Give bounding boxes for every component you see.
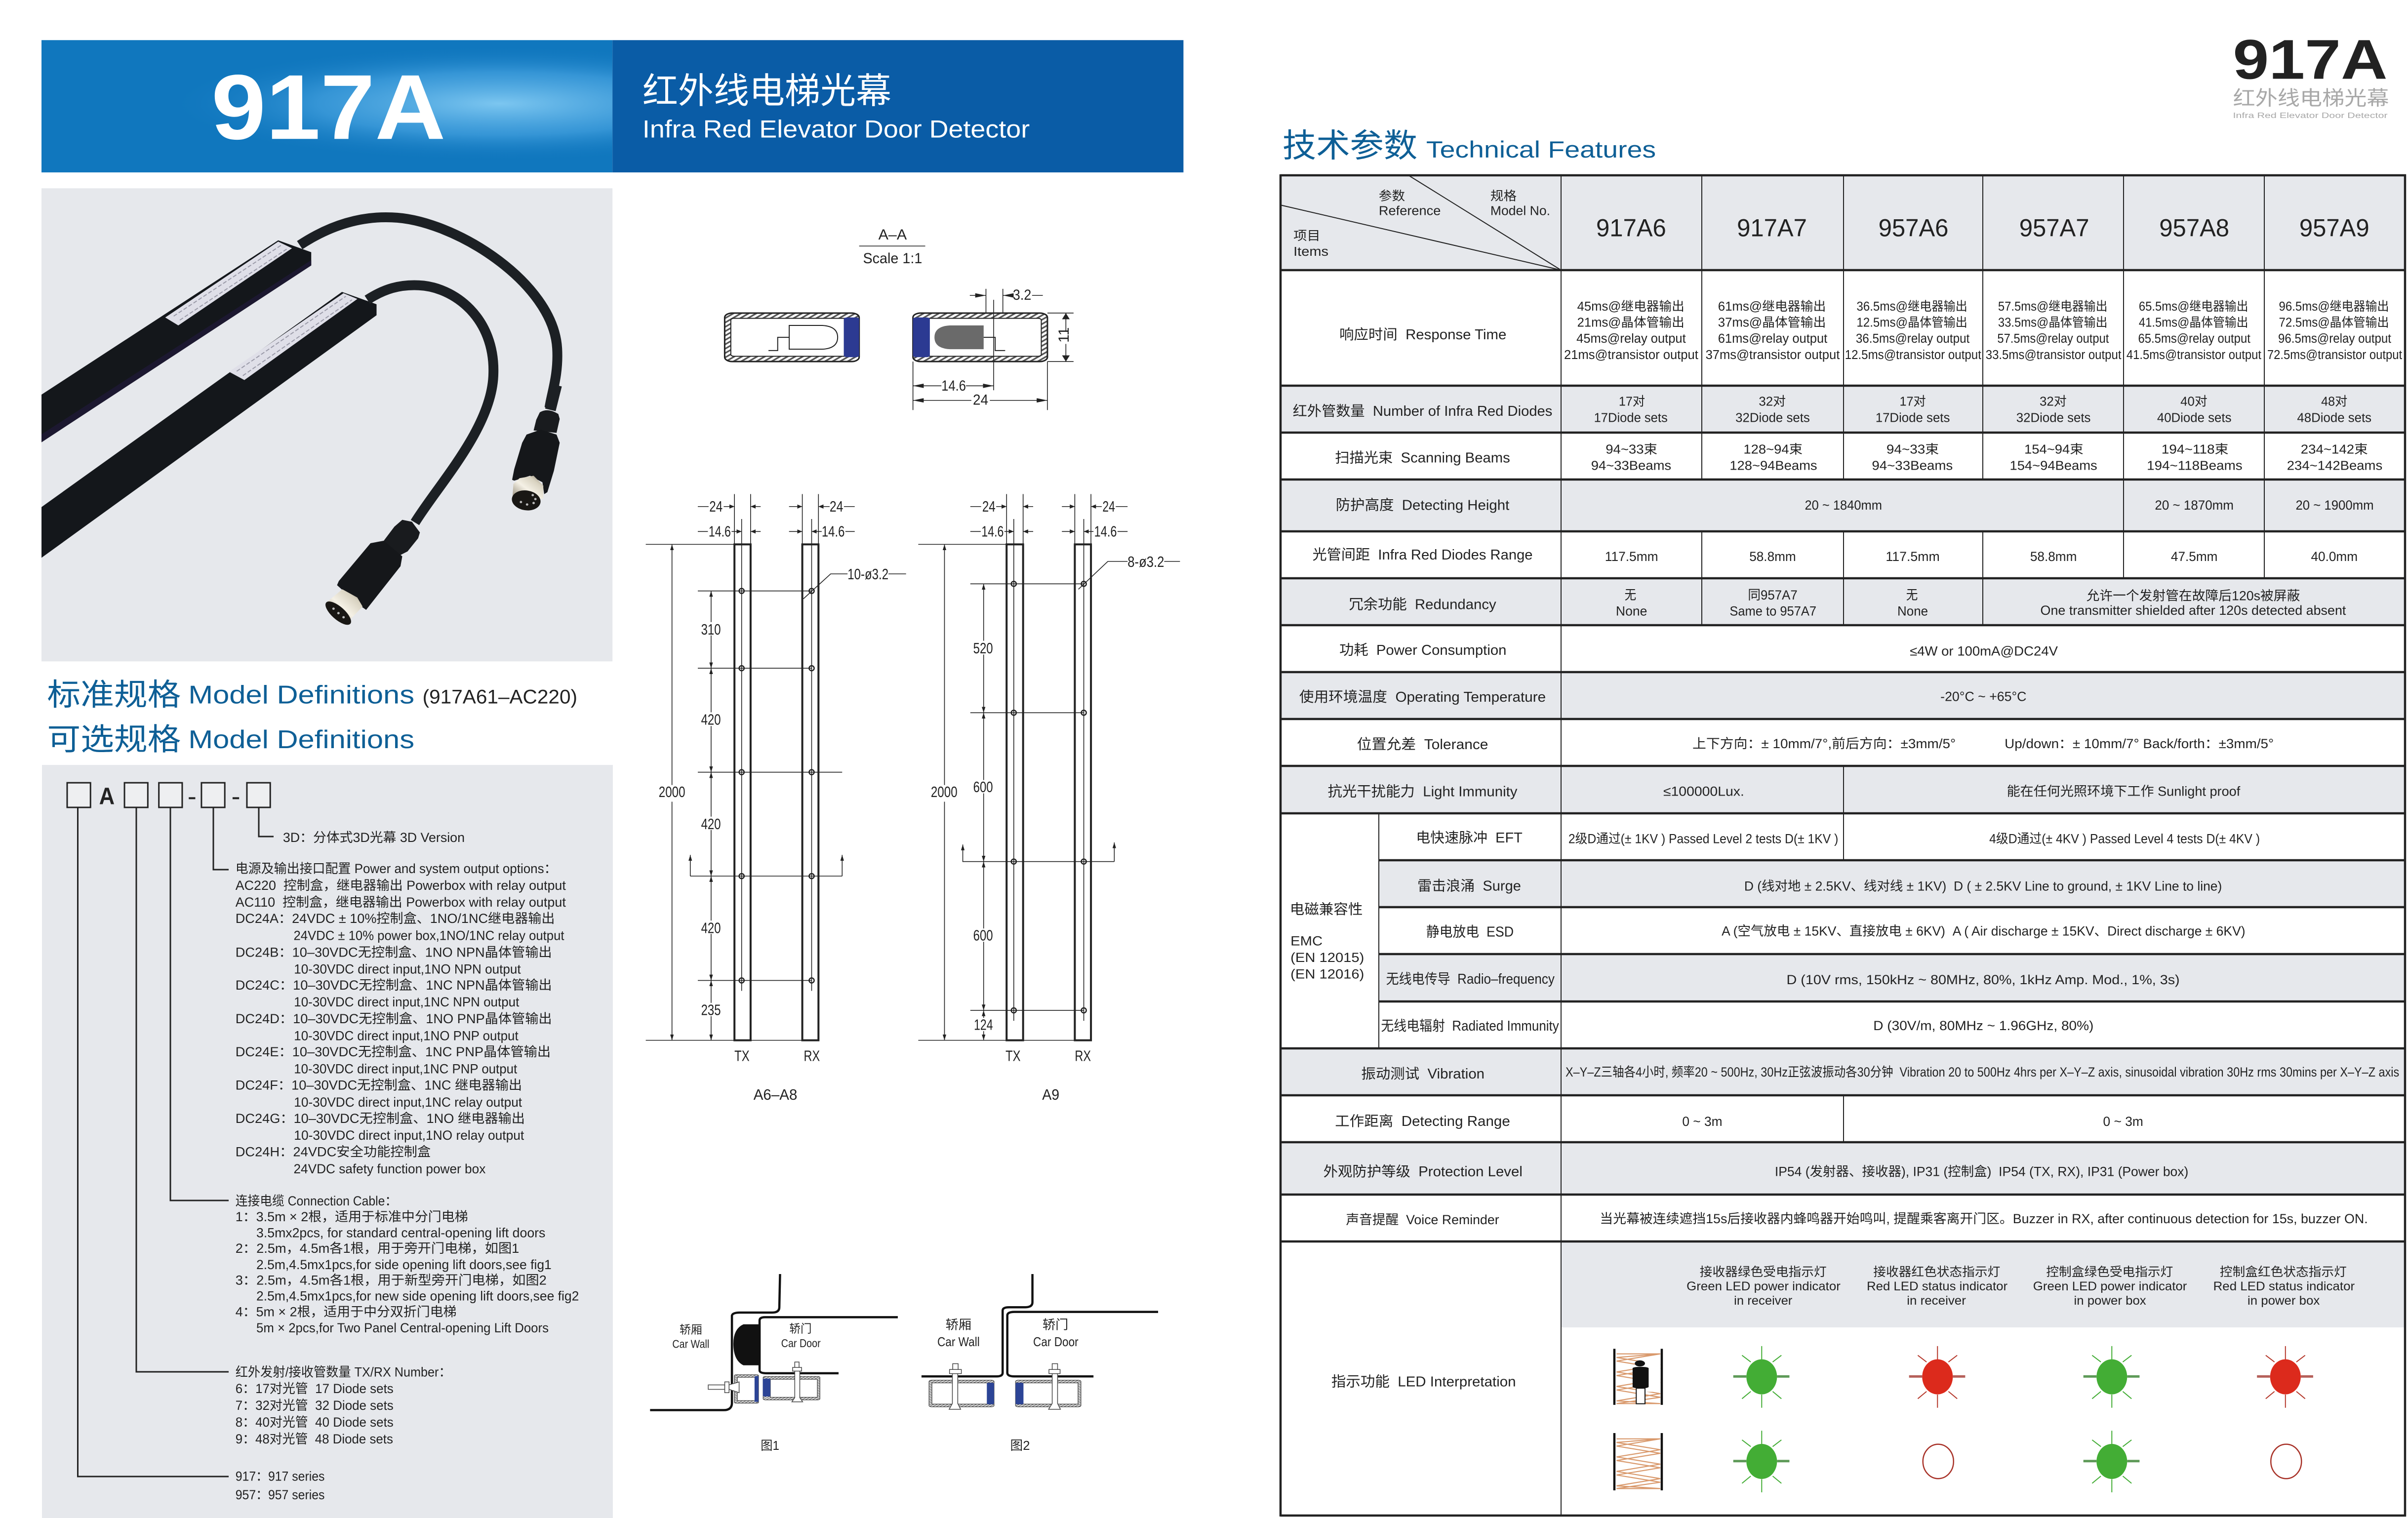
EMC group label bbox=[1290, 901, 1364, 982]
row: response time: 45ms@relay output bbox=[1576, 331, 1686, 346]
table lower rows: 电磁兼容性 bbox=[1290, 901, 1363, 917]
A6-A8 labels: 420 bbox=[701, 919, 721, 936]
model names: 957A8 bbox=[2159, 214, 2229, 242]
A6-A8 labels: 24 bbox=[830, 498, 843, 515]
header corner labels: Reference bbox=[1379, 204, 1441, 218]
dimension labels: 24 bbox=[973, 392, 988, 408]
row: response time: 41.5ms@晶体管输出 bbox=[2139, 315, 2248, 329]
row: redundancy: 无 bbox=[1906, 588, 1918, 602]
row: LED interpretation: 指示功能 LED Interpretation bbox=[1331, 1374, 1516, 1390]
text block: 3D version and power options: DC24A：24VDC ± 10%控制盒、1NO/1NC继电器输出 bbox=[236, 912, 555, 926]
row: response time: 61ms@继电器输出 bbox=[1718, 299, 1826, 313]
text block: 3D version and power options: DC24E：10–30VDC无控制盒、1NC PNP晶体管输出 bbox=[236, 1045, 551, 1059]
model names: 957A6 bbox=[1879, 214, 1948, 242]
text block: 3D version and power options: DC24F：10–30VDC无控制盒、1NC 继电器输出 bbox=[236, 1078, 522, 1093]
row: number of infra red diodes: 17对 bbox=[1899, 394, 1926, 408]
LED column headings: in power box bbox=[2074, 1294, 2146, 1307]
heading: optional model definitions: Model Definitions bbox=[188, 725, 414, 754]
dimension lines bbox=[913, 289, 1074, 410]
table lower rows bbox=[1290, 830, 2399, 1227]
heading: standard model definitions: (917A61–AC220) bbox=[423, 685, 577, 708]
row: scanning beams: 194~118Beams bbox=[2147, 459, 2243, 473]
panel: product photo bbox=[41, 188, 612, 661]
table middle rows: -20°C ~ +65°C bbox=[1940, 689, 2026, 704]
row: infra red diodes range: 117.5mm bbox=[1886, 549, 1940, 564]
text block: power options continued, cable and diode options: 6：17对光管 17 Diode sets bbox=[236, 1381, 394, 1396]
diagram: installation figures 1 and 2: Car Door bbox=[1033, 1335, 1079, 1349]
row: response time: 57.5ms@继电器输出 bbox=[1998, 299, 2107, 313]
figure 2 labels: 图2 bbox=[1010, 1438, 1030, 1453]
dimension label: 11: 11 bbox=[1056, 327, 1072, 343]
row: surge bbox=[1417, 878, 2222, 894]
heading: optional model definitions: 可选规格 bbox=[47, 722, 181, 757]
row: response time: 12.5ms@晶体管输出 bbox=[1856, 315, 1967, 329]
table lower rows: (EN 12015) bbox=[1290, 950, 1364, 965]
figure 1 labels: 轿门 bbox=[789, 1322, 812, 1335]
text block: power options continued, cable and diode options: 24VDC safety function power box bbox=[293, 1161, 485, 1176]
text block: 3D version and power options: DC24C：10–30VDC无控制盒、1NC NPN晶体管输出 bbox=[236, 978, 552, 993]
text block: power options continued, cable and diode options: 3.5mx2pcs, for standard central-opening lift doors bbox=[256, 1226, 545, 1240]
banner left gradient bbox=[41, 40, 612, 172]
A9 labels: 24 bbox=[1102, 498, 1115, 515]
row: number of infra red diodes bbox=[1293, 394, 2371, 425]
row: detecting height: 防护高度 Detecting Height bbox=[1336, 497, 1509, 513]
A9 bars bbox=[918, 494, 1180, 1040]
dimension labels: 14.6 bbox=[941, 377, 966, 394]
table lower rows: D (30V/m, 80MHz ~ 1.96GHz, 80%) bbox=[1873, 1018, 2093, 1033]
row: number of infra red diodes: 32对 bbox=[1759, 394, 1786, 408]
figure 1 labels: 轿厢 bbox=[680, 1323, 702, 1336]
section title bbox=[859, 226, 925, 266]
A6-A8 labels: 2000 bbox=[659, 783, 685, 800]
row: number of infra red diodes: 40Diode sets bbox=[2157, 411, 2232, 425]
row: response time: 37ms@transistor output bbox=[1706, 348, 1840, 362]
icons: LEDs when beam blocked bbox=[1733, 1346, 2313, 1408]
photo background bbox=[41, 188, 612, 661]
A9 labels: 14.6 bbox=[1094, 523, 1117, 540]
dimension labels bbox=[941, 286, 1031, 408]
row: redundancy: None bbox=[1897, 603, 1928, 618]
diagram: installation figures 1 and 2 bbox=[650, 1274, 1158, 1453]
row: infra red diodes range bbox=[1312, 547, 2358, 564]
figure 1 labels: 图1 bbox=[761, 1439, 779, 1453]
gray row fills bbox=[1281, 175, 2405, 1327]
text block: 3D version and power options: AC110 控制盒，继电器输出 Powerbox with relay output bbox=[236, 895, 566, 910]
right cross section bbox=[913, 313, 1047, 361]
header corner labels: 规格 bbox=[1490, 189, 1517, 203]
section title: A–A bbox=[879, 226, 907, 242]
text block: power options continued, cable and diode options: DC24H：24VDC安全功能控制盒 bbox=[236, 1145, 431, 1159]
row: surge: 雷击浪涌 Surge bbox=[1417, 878, 1521, 894]
text block: 3D version and power options: 10-30VDC direct input,1NC PNP output bbox=[294, 1062, 518, 1077]
A6-A8 labels: 310 bbox=[701, 621, 721, 638]
row: number of infra red diodes: 32对 bbox=[2040, 394, 2067, 408]
A9 labels: 14.6 bbox=[981, 523, 1003, 540]
row: EFT: 电快速脉冲 EFT bbox=[1416, 830, 1523, 845]
title: 917A: 917A bbox=[211, 56, 446, 159]
text block: 3D version and power options: AC220 控制盒，继电器输出 Powerbox with relay output bbox=[236, 879, 566, 893]
text block: 3D version and power options: 24VDC ± 10% power box,1NO/1NC relay output bbox=[293, 928, 564, 943]
row: response time: 33.5ms@晶体管输出 bbox=[1998, 315, 2107, 329]
row: light immunity: 抗光干扰能力 Light Immunity bbox=[1327, 784, 1518, 799]
row: redundancy: 冗余功能 Redundancy bbox=[1349, 597, 1496, 612]
row: scanning beams: 94~33束 bbox=[1605, 442, 1657, 456]
row: detecting height bbox=[1336, 497, 2374, 513]
row: protection level bbox=[1324, 1163, 2188, 1179]
text block: power options continued, cable and diode options: 957：957 series bbox=[236, 1487, 324, 1502]
A9 labels bbox=[931, 498, 1164, 1103]
row: number of infra red diodes: 17对 bbox=[1619, 394, 1645, 408]
A9 labels: 24 bbox=[982, 498, 996, 515]
A6-A8 labels: 235 bbox=[701, 1001, 721, 1018]
LED column headings: 接收器绿色受电指示灯 bbox=[1700, 1265, 1827, 1279]
row: infra red diodes range: 47.5mm bbox=[2171, 549, 2217, 564]
row: EFT bbox=[1416, 830, 2260, 846]
A6-A8 labels: RX bbox=[804, 1047, 820, 1064]
text block: 3D version and power options: 电源及输出接口配置 Power and system output options： bbox=[236, 862, 557, 877]
LED column headings bbox=[1686, 1265, 2355, 1307]
LED column headings: Red LED status indicator bbox=[1867, 1279, 2007, 1293]
row: voice reminder bbox=[1346, 1211, 2368, 1227]
heading: standard model definitions: 标准规格 bbox=[47, 678, 181, 712]
text block: power options continued, cable and diode options: 10-30VDC direct input,1NO relay output bbox=[294, 1128, 524, 1143]
text block: power options continued, cable and diode options: 3：2.5m，4.5m各1根，用于新型旁开门电梯，如图2 bbox=[236, 1273, 547, 1288]
connector lines bbox=[78, 807, 274, 1477]
LED column headings: 接收器红色状态指示灯 bbox=[1873, 1265, 2000, 1279]
figure 1 walls bbox=[650, 1274, 898, 1410]
row: response time: 45ms@继电器输出 bbox=[1577, 299, 1685, 313]
header corner labels: 项目 bbox=[1293, 229, 1321, 243]
text block: power options continued, cable and diode options: 10-30VDC direct input,1NC relay output bbox=[294, 1095, 522, 1110]
A6-A8 labels bbox=[659, 498, 888, 1103]
model names: 917A7 bbox=[1737, 214, 1807, 242]
A6-A8 arrows bbox=[672, 507, 855, 1040]
icon: beams clear bbox=[1614, 1433, 1662, 1490]
row: infra red diodes range: 117.5mm bbox=[1605, 549, 1658, 564]
row: response time bbox=[1339, 299, 2402, 362]
A6-A8 bars bbox=[646, 494, 906, 1040]
heading: technical features: 技术参数 bbox=[1283, 127, 1417, 164]
row: response time: 57.5ms@relay output bbox=[1997, 331, 2109, 346]
header corner labels: 参数 bbox=[1379, 189, 1405, 203]
row: tolerance bbox=[1357, 736, 2274, 753]
left cross section bbox=[724, 313, 859, 361]
heading: standard model definitions bbox=[47, 678, 577, 712]
row: radio frequency: 无线电传导 Radio–frequency bbox=[1386, 971, 1555, 987]
table header and first rows bbox=[1293, 189, 2402, 473]
text block: power options continued, cable and diode options: 917：917 series bbox=[236, 1469, 324, 1484]
row: EFT: 2级D通过(± 1KV ) Passed Level 2 tests D(± 1KV ) bbox=[1568, 832, 1838, 846]
banner right panel bbox=[612, 40, 1183, 172]
row: scanning beams: 194~118束 bbox=[2162, 442, 2229, 456]
text block: 3D version and power options: 3D：分体式3D光幕 3D Version bbox=[283, 831, 465, 845]
connector plugs bbox=[321, 385, 560, 628]
row: radio frequency bbox=[1386, 971, 2180, 987]
table lower rows: (EN 12016) bbox=[1290, 966, 1364, 982]
text block: power options continued, cable and diode options: 8：40对光管 40 Diode sets bbox=[236, 1415, 394, 1430]
figure 2 sensors bbox=[929, 1363, 1081, 1409]
row: number of infra red diodes: 17Diode sets bbox=[1876, 411, 1950, 425]
row: response time: 36.5ms@relay output bbox=[1856, 331, 1969, 346]
A9 holes bbox=[1011, 581, 1086, 1013]
table middle rows bbox=[1299, 497, 2374, 799]
panel background bbox=[42, 765, 613, 1518]
row: redundancy bbox=[1349, 588, 2346, 618]
heading: standard model definitions: Model Definitions bbox=[188, 680, 414, 709]
row: detecting range: 工作距离 Detecting Range bbox=[1335, 1113, 1510, 1129]
figure 2 labels bbox=[937, 1318, 1079, 1453]
LED column headings: in receiver bbox=[1907, 1294, 1966, 1307]
LED column headings: in receiver bbox=[1734, 1294, 1792, 1307]
row: number of infra red diodes: 40对 bbox=[2180, 394, 2207, 408]
diagram: installation figures 1 and 2: Car Door bbox=[781, 1337, 821, 1350]
text block: power options continued, cable and diode options: 9：48对光管 48 Diode sets bbox=[236, 1432, 393, 1446]
row: redundancy: 同957A7 bbox=[1748, 588, 1798, 602]
row: LED interpretation bbox=[1331, 1265, 2355, 1492]
A6-A8 labels: 24 bbox=[709, 498, 722, 515]
row: redundancy: Same to 957A7 bbox=[1729, 603, 1816, 618]
row: number of infra red diodes: 32Diode sets bbox=[2016, 411, 2090, 425]
row: infra red diodes range: 光管间距 Infra Red Diodes Range bbox=[1312, 547, 1533, 563]
upper sensor bar bbox=[41, 240, 311, 442]
row: ESD: 静电放电 ESD bbox=[1426, 923, 1514, 940]
A6-A8 labels: 420 bbox=[701, 711, 721, 728]
model names: 917A6 bbox=[1596, 214, 1666, 242]
figure 2 walls bbox=[922, 1274, 1158, 1376]
row: response time: 65.5ms@继电器输出 bbox=[2139, 299, 2248, 313]
model code boxes: A bbox=[99, 783, 115, 809]
row: voice reminder: 声音提醒 Voice Reminder bbox=[1346, 1212, 1499, 1227]
figure 2 labels: Car Wall bbox=[937, 1335, 980, 1349]
text block: power options continued, cable and diode options: 2.5m,4.5mx1pcs,for new side opening lift doors,see fig2 bbox=[256, 1289, 579, 1304]
row: vibration: 振动测试 Vibration bbox=[1361, 1066, 1485, 1081]
figure 2 labels: 轿厢 bbox=[946, 1318, 971, 1332]
row: redundancy: 无 bbox=[1625, 588, 1636, 602]
row: response time: 12.5ms@transistor output bbox=[1845, 348, 1981, 362]
A9 labels: 8-ø3.2 bbox=[1127, 553, 1164, 570]
row: response time: 65.5ms@relay output bbox=[2138, 331, 2250, 346]
A9 labels: 2000 bbox=[931, 783, 958, 800]
row: tolerance: 位置允差 Tolerance bbox=[1357, 736, 1488, 753]
heading: optional model definitions bbox=[47, 722, 414, 757]
row: detecting range: 0 ~ 3m bbox=[1682, 1114, 1723, 1129]
diagram: A6-A8 and A9 mounting dimensions bbox=[646, 494, 1180, 1103]
model names: 957A7 bbox=[2019, 214, 2089, 242]
figure 1 labels: Car Wall bbox=[672, 1338, 709, 1351]
title: English product name: Infra Red Elevator Door Detector bbox=[642, 116, 1030, 143]
text block: power options continued, cable and diode options bbox=[236, 1095, 579, 1502]
A9 labels: TX bbox=[1005, 1047, 1021, 1064]
row: redundancy: None bbox=[1616, 603, 1647, 618]
text block: power options continued, cable and diode options: 5m × 2pcs,for Two Panel Central-opening Lift Doors bbox=[256, 1320, 549, 1335]
text block: power options continued, cable and diode options: 2.5m,4.5mx1pcs,for side opening lift doors,see fig1 bbox=[256, 1257, 552, 1272]
row: operating temperature: 使用环境温度 Operating Temperature bbox=[1299, 689, 1546, 705]
row: scanning beams: 128~94Beams bbox=[1729, 459, 1817, 473]
text block: 3D version and power options: 10-30VDC direct input,1NC NPN output bbox=[294, 995, 520, 1009]
panel: technical parameter table bbox=[1280, 174, 2406, 1517]
panel: model code definitions bbox=[42, 765, 613, 1518]
cable 2 bbox=[367, 285, 493, 522]
lower sensor bar bbox=[41, 292, 376, 558]
A6-A8 labels: 14.6 bbox=[822, 523, 844, 540]
row: response time: 21ms@transistor output bbox=[1564, 348, 1698, 362]
title: Chinese product name: 红外线电梯光幕 bbox=[642, 71, 891, 111]
row: scanning beams bbox=[1335, 442, 2382, 473]
A6-A8 labels: 420 bbox=[701, 815, 721, 832]
upper connector bbox=[510, 385, 560, 513]
text block: 3D version and power options: DC24B：10–30VDC无控制盒、1NO NPN晶体管输出 bbox=[236, 945, 552, 960]
row: power consumption: 功耗 Power Consumption bbox=[1339, 642, 1506, 658]
row: light immunity bbox=[1327, 784, 2241, 799]
LED column headings: Green LED power indicator bbox=[1686, 1279, 1841, 1293]
figure 2 labels: 轿门 bbox=[1043, 1318, 1068, 1332]
row: response time: 36.5ms@继电器输出 bbox=[1856, 299, 1967, 313]
row: response time: 61ms@relay output bbox=[1718, 331, 1827, 346]
row: protection level: 外观防护等级 Protection Level bbox=[1324, 1163, 1523, 1179]
row: response time: 响应时间 Response Time bbox=[1339, 326, 1506, 342]
text block: power options continued, cable and diode options: 连接电缆 Connection Cable： bbox=[236, 1194, 397, 1208]
table header and first rows: Model No. bbox=[1490, 204, 1550, 218]
text block: power options continued, cable and diode options: 1：3.5m × 2根，适用于标准中分门电梯 bbox=[236, 1209, 468, 1224]
A9 labels: RX bbox=[1075, 1047, 1091, 1064]
row: response time: 21ms@晶体管输出 bbox=[1577, 315, 1685, 329]
text block: power options continued, cable and diode options: 红外发射/接收管数量 TX/RX Number： bbox=[236, 1365, 451, 1380]
A9 labels: 124 bbox=[974, 1016, 993, 1033]
row: detecting range bbox=[1335, 1113, 2143, 1129]
text block: 3D version and power options: DC24D：10–30VDC无控制盒、1NO PNP晶体管输出 bbox=[236, 1012, 552, 1026]
row: scanning beams: 128~94束 bbox=[1743, 442, 1803, 456]
A9 labels: 600 bbox=[973, 927, 993, 944]
section title: Scale 1:1 bbox=[863, 250, 922, 266]
row: number of infra red diodes: 48对 bbox=[2321, 394, 2347, 408]
icon: beams blocked by person bbox=[1614, 1349, 1662, 1405]
header corner labels: Items bbox=[1293, 244, 1328, 259]
heading: technical features: Technical Features bbox=[1426, 136, 1656, 162]
row: response time: 37ms@晶体管输出 bbox=[1718, 315, 1826, 329]
row: number of infra red diodes: 17Diode sets bbox=[1594, 411, 1668, 425]
A6-A8 labels: TX bbox=[734, 1047, 750, 1064]
lower connector bbox=[321, 520, 420, 628]
top right product logo bbox=[2233, 28, 2389, 120]
header corner labels bbox=[1293, 189, 1550, 259]
row: radiated immunity: 无线电辐射 Radiated Immunity bbox=[1381, 1018, 1559, 1034]
table middle rows: ≤4W or 100mA@DC24V bbox=[1910, 643, 2058, 658]
row: infra red diodes range: 58.8mm bbox=[2030, 549, 2077, 564]
diagram: A-A cross sections bbox=[724, 226, 1074, 410]
A9 arrows bbox=[944, 507, 1127, 1040]
text block: 3D version and power options: 10-30VDC direct input,1NO NPN output bbox=[294, 962, 521, 977]
A9 labels: 600 bbox=[973, 778, 993, 796]
text block: power options continued, cable and diode options: 7：32对光管 32 Diode sets bbox=[236, 1398, 394, 1413]
row: scanning beams: 154~94束 bbox=[2024, 442, 2084, 456]
row: number of infra red diodes: 红外管数量 Number of Infra Red Diodes bbox=[1293, 403, 1552, 419]
row: number of infra red diodes: 32Diode sets bbox=[1735, 411, 1810, 425]
text block: 3D version and power options bbox=[236, 831, 566, 1093]
EMC group label: EMC bbox=[1290, 933, 1323, 949]
cable 1 bbox=[300, 217, 558, 408]
header banner bbox=[41, 40, 1183, 172]
icons: LEDs when beam clear bbox=[1733, 1431, 2301, 1492]
A9 labels: 520 bbox=[973, 639, 993, 656]
A6-A8 labels: A6–A8 bbox=[754, 1086, 797, 1103]
figure 1 labels bbox=[672, 1322, 821, 1453]
model code boxes bbox=[67, 783, 270, 809]
model names bbox=[1596, 214, 2369, 242]
figure 1 sensors bbox=[708, 1362, 820, 1403]
table rules bbox=[1280, 174, 2406, 1517]
A6-A8 holes bbox=[739, 589, 814, 983]
row: detecting height: 20 ~ 1840mm bbox=[1805, 498, 1882, 513]
row: response time: 33.5ms@transistor output bbox=[1986, 348, 2122, 362]
dimension labels: 3.2 bbox=[1013, 286, 1031, 303]
row: scanning beams: 94~33束 bbox=[1886, 442, 1939, 456]
text block: power options continued, cable and diode options: 4：5m × 2根，适用于中分双折门电梯 bbox=[236, 1305, 456, 1319]
row: light immunity: ≤100000Lux. bbox=[1663, 784, 1744, 799]
A9 labels: A9 bbox=[1042, 1086, 1059, 1103]
row: scanning beams: 94~33Beams bbox=[1591, 459, 1671, 473]
row: scanning beams: 扫描光束 Scanning Beams bbox=[1335, 450, 1510, 465]
row: scanning beams: 94~33Beams bbox=[1872, 459, 1953, 473]
text block: power options continued, cable and diode options: DC24G：10–30VDC无控制盒、1NO 继电器输出 bbox=[236, 1111, 525, 1126]
row: ESD bbox=[1426, 923, 2246, 940]
A6-A8 labels: 10-ø3.2 bbox=[847, 565, 888, 582]
text block: power options continued, cable and diode options: 2：2.5m，4.5m各1根，用于旁开门电梯，如图1 bbox=[236, 1241, 519, 1256]
row: scanning beams: 154~94Beams bbox=[2009, 459, 2097, 473]
A6-A8 labels: 14.6 bbox=[709, 523, 731, 540]
table lower rows: 0 ~ 3m bbox=[2103, 1114, 2143, 1129]
text block: 3D version and power options: 10-30VDC direct input,1NO PNP output bbox=[294, 1029, 519, 1043]
row: infra red diodes range: 58.8mm bbox=[1749, 549, 1796, 564]
